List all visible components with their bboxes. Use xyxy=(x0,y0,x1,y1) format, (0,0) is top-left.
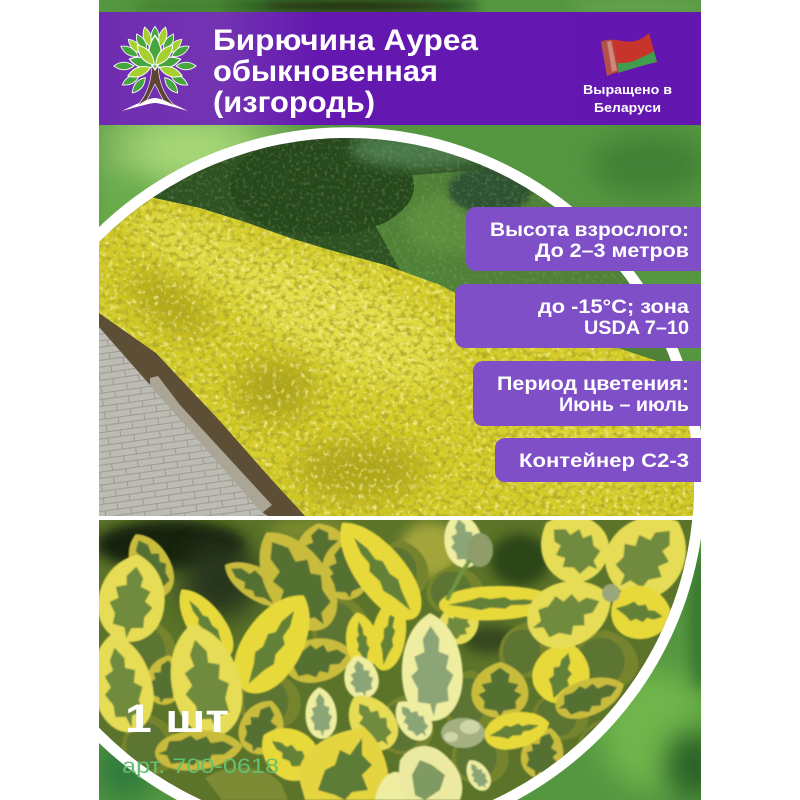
photo: variegated leaves xyxy=(99,520,692,800)
title: (изгородь) xyxy=(213,86,375,119)
label: height: Высота взрослого: xyxy=(490,220,689,241)
soil strip xyxy=(99,313,305,516)
label: hardiness: USDA 7–10 xyxy=(584,318,689,339)
header: purple title bar xyxy=(99,12,701,125)
title: обыкновенная xyxy=(213,55,438,88)
label: hardiness xyxy=(455,284,701,348)
icon: tree logo xyxy=(114,26,196,111)
divider line between photos xyxy=(99,516,693,520)
label: height: До 2–3 метров xyxy=(535,241,689,262)
lower olive leaf xyxy=(205,768,288,800)
title xyxy=(213,24,478,119)
article number: арт. 700-0618 xyxy=(122,755,279,778)
origin caption: Беларуси xyxy=(594,100,661,115)
label: flowering period: Период цветения: xyxy=(497,374,689,395)
panel: green blurred background xyxy=(95,0,725,800)
label: height xyxy=(466,207,701,271)
hedge body xyxy=(99,190,701,520)
dark clipped bush xyxy=(230,136,414,236)
lawn behind the hedge xyxy=(376,171,671,361)
flower buds xyxy=(441,533,620,748)
icon: Belarus flag xyxy=(601,33,657,76)
quantity: 1 шт xyxy=(125,697,229,741)
label: hardiness: до -15°C; зона xyxy=(538,297,689,318)
background leaves xyxy=(122,540,638,785)
centre leaf cluster xyxy=(153,508,435,800)
right leaf cluster xyxy=(394,520,687,800)
label: flowering period: Июнь – июль xyxy=(559,395,689,416)
label: container: Контейнер С2-3 xyxy=(519,451,689,472)
curb xyxy=(150,376,272,513)
paved path xyxy=(99,327,268,516)
lower pale leaf xyxy=(399,746,462,800)
label: flowering period xyxy=(473,361,701,426)
large lower leaf xyxy=(298,728,389,800)
origin caption: Выращено в xyxy=(583,82,672,97)
title: Бирючина Ауреа xyxy=(213,24,478,57)
left leaf cluster xyxy=(99,522,365,734)
panel: white circle ring xyxy=(99,127,701,800)
photo: yellow hedge xyxy=(99,130,701,520)
origin caption xyxy=(583,82,672,115)
label: container xyxy=(495,438,701,482)
